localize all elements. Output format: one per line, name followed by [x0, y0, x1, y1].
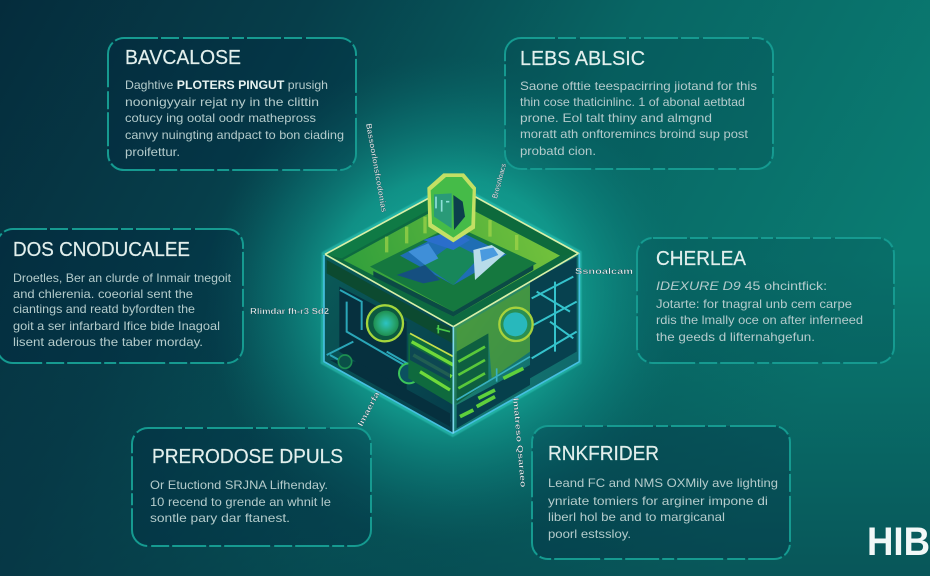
heading: middle right: CHERLEA [656, 248, 747, 270]
text block: top left: Daghtive PLOTERS PINGUT prusigh [125, 78, 328, 92]
cube edges [324, 197, 579, 433]
illustration: glass cube [324, 173, 579, 433]
text block: middle left: Droetles, Ber an clurde of Inmair tnegoit [13, 271, 232, 285]
connector label: top left: Bassoorlonsfcodonias [364, 123, 389, 214]
connector label: top right: Brosnloacs [490, 162, 508, 200]
connector label: bottom right: Imatreso Qsaraeo [511, 397, 528, 488]
text block: top right [520, 79, 757, 158]
text block: top right: probatd cion. [520, 144, 596, 158]
connector label: bottom left: Imaerfa [356, 390, 382, 428]
text block: middle right: the geeds d lifternahgefun. [656, 330, 815, 344]
text block: middle right: rdis the lmally oce on after inferneed [656, 313, 863, 327]
cube right face [453, 253, 579, 433]
text block: middle left: goit a ser infarbard Ifice bide Inagoal [13, 319, 220, 333]
panel: middle left [0, 229, 243, 363]
cube central module [408, 325, 488, 405]
text block: middle left: lisent aderous the taber morday. [13, 335, 203, 349]
connector label: right: Ssnoalcam [575, 267, 633, 276]
text block: top right: prone. Eol talt thiny and almgnd [520, 111, 712, 125]
panel: top right [505, 38, 773, 169]
cube left face [324, 255, 453, 433]
text block: bottom left: sontle pary dar ftanest. [150, 511, 290, 525]
text block: bottom left: 10 recend to grende an whnit le [150, 495, 331, 509]
text block: middle right [656, 279, 863, 344]
panel: top left [108, 38, 356, 170]
heading: top right: LEBS ABLSIC [520, 48, 645, 70]
text block: top left: noonigyyair rejat ny in the clittin [125, 95, 319, 109]
text block: top right: moratt ath onftoremincs broind sup post [520, 127, 749, 141]
text block: bottom right: poorl estssloy. [548, 527, 631, 541]
icon: crystal gem [427, 173, 476, 242]
text block: bottom right [548, 476, 778, 541]
text block: bottom right: ynriate tomiers for arginer impone di [548, 494, 768, 508]
connector label: left: Rlimdar fh-r3 Sd2 [250, 307, 330, 316]
text block: top left: cotucy ing ootal oodr mathepross [125, 111, 316, 125]
panel: bottom left [132, 428, 371, 546]
text block: top left: proifettur. [125, 145, 180, 159]
text block: top left [125, 78, 344, 159]
panel: middle right [637, 238, 894, 363]
text block: middle left: ciantings and reatd byfordten the [13, 302, 195, 316]
text block: bottom right: Leand FC and NMS OXMily ave lighting [548, 476, 778, 490]
text block: middle left: and chlerenia. coeorial sent the [13, 287, 193, 301]
text block: bottom right: liberl hol be and to margicanal [548, 510, 725, 524]
text block: middle right: IDEXURE D9 45 ohcintfick: [656, 279, 827, 293]
text block: middle left [13, 271, 232, 349]
text block: top right: thin cose thaticinlinc. 1 of abonal aetbtad [520, 95, 745, 109]
text block: bottom left: Or Etuctiond SRJNA Lifhenday. [150, 478, 328, 492]
heading: bottom right: RNKFRIDER [548, 443, 659, 465]
cube glow [324, 185, 578, 433]
text block: bottom left [150, 478, 331, 525]
text block: middle right: Jotarte: for tnagral unb cem carpe [656, 297, 852, 311]
panel: bottom right [532, 426, 790, 559]
heading: middle left: DOS CNODUCALEE [13, 239, 190, 261]
text block: top left: canvy nuingting andpact to bon ciading [125, 128, 344, 142]
text block: top right: Saone ofttie teespacirring jiotand for this [520, 79, 757, 93]
heading: top left: BAVCALOSE [125, 47, 241, 69]
cube top tray [325, 185, 578, 327]
heading: bottom left: PRERODOSE DPULS [152, 446, 343, 468]
